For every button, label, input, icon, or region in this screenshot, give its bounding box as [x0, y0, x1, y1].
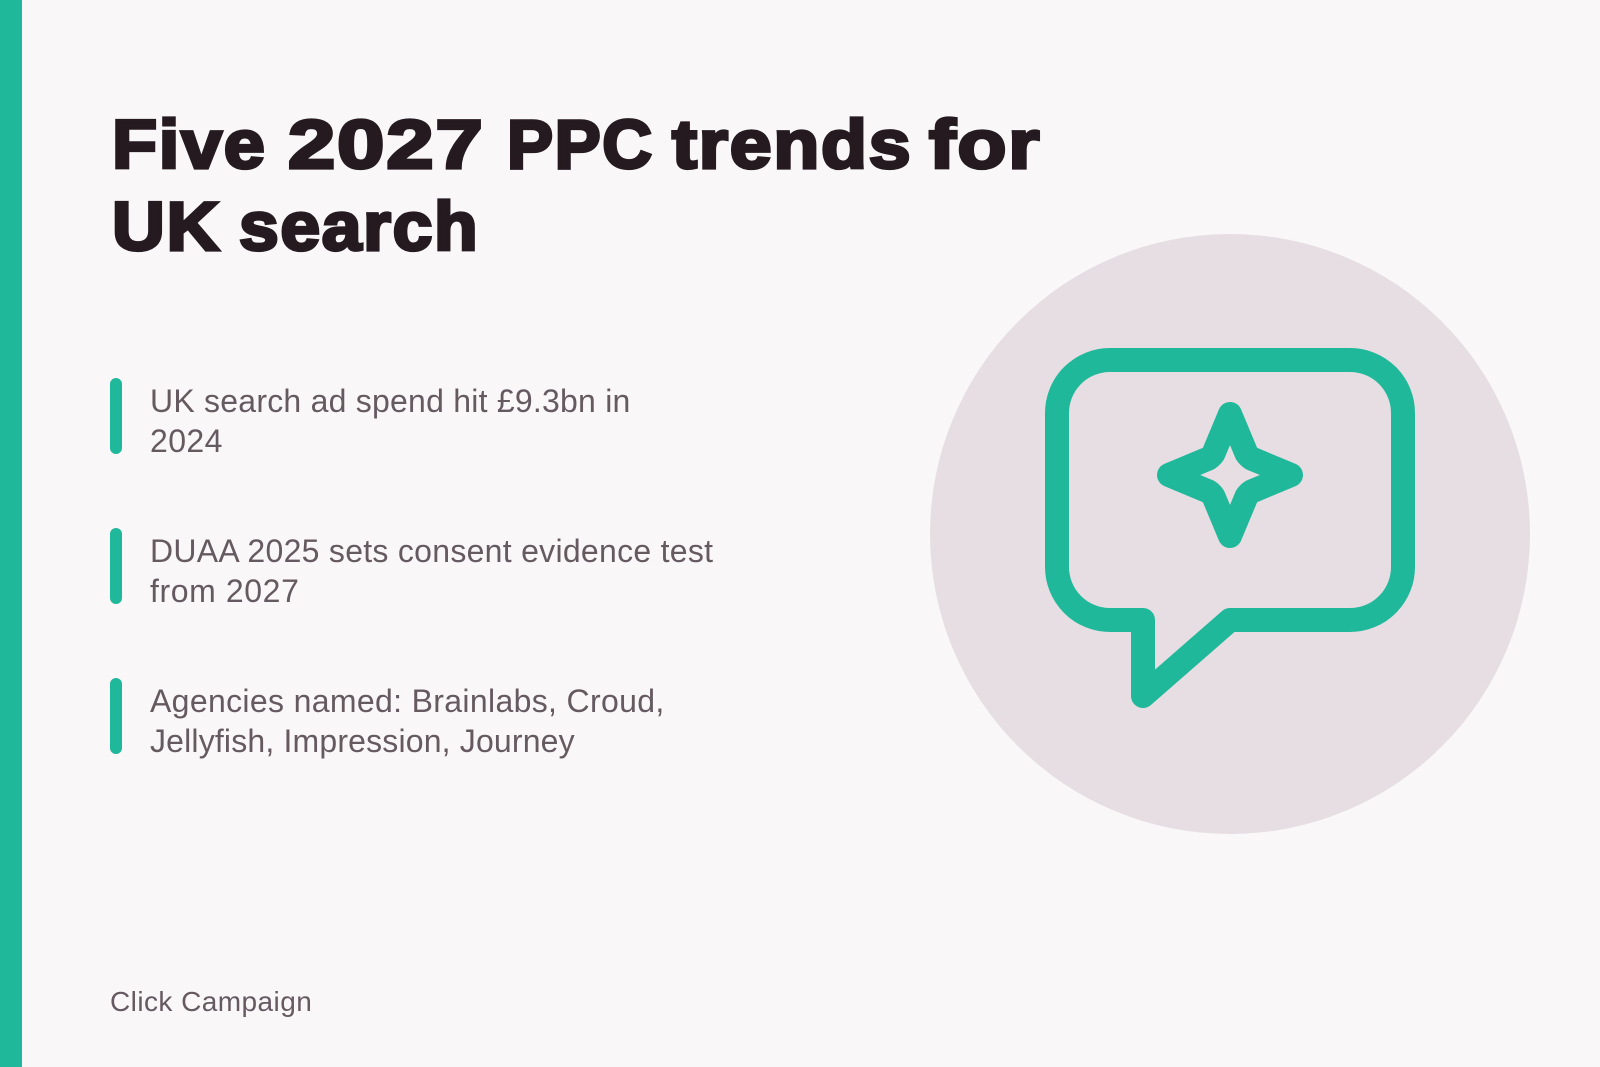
bullet 3 [110, 678, 665, 759]
circle backdrop [930, 234, 1530, 834]
title: trends [672, 106, 912, 183]
icon: speech bubble with sparkle in circle [930, 234, 1530, 834]
title: 2027 [288, 106, 485, 183]
accent stripe [0, 0, 22, 1067]
bullet 1 [110, 378, 631, 459]
bullet text 1: UK search ad spend hit £9.3bn in [150, 383, 631, 419]
sparkle star [1169, 414, 1291, 536]
bullet text 3: Jellyfish, Impression, Journey [150, 723, 575, 759]
bullet text 1 [150, 383, 631, 459]
bullet list [110, 378, 713, 759]
bullet marker 3 [110, 678, 122, 754]
bullet text 2: from 2027 [150, 573, 299, 609]
title: UK [112, 188, 221, 265]
bullet text 2 [150, 533, 713, 609]
bullet text 2: DUAA 2025 sets consent evidence test [150, 533, 713, 569]
footer brand: Click Campaign [110, 986, 312, 1017]
title: Five [112, 106, 267, 183]
title: for [929, 106, 1041, 183]
title: search [239, 188, 479, 265]
speech bubble outline [1057, 360, 1403, 696]
bullet marker 2 [110, 528, 122, 604]
bullet marker 1 [110, 378, 122, 454]
bullet text 3: Agencies named: Brainlabs, Croud, [150, 683, 665, 719]
bullet 2 [110, 528, 713, 609]
bullet text 3 [150, 683, 665, 759]
title [112, 106, 1041, 265]
bullet text 1: 2024 [150, 423, 223, 459]
title: PPC [507, 106, 654, 183]
